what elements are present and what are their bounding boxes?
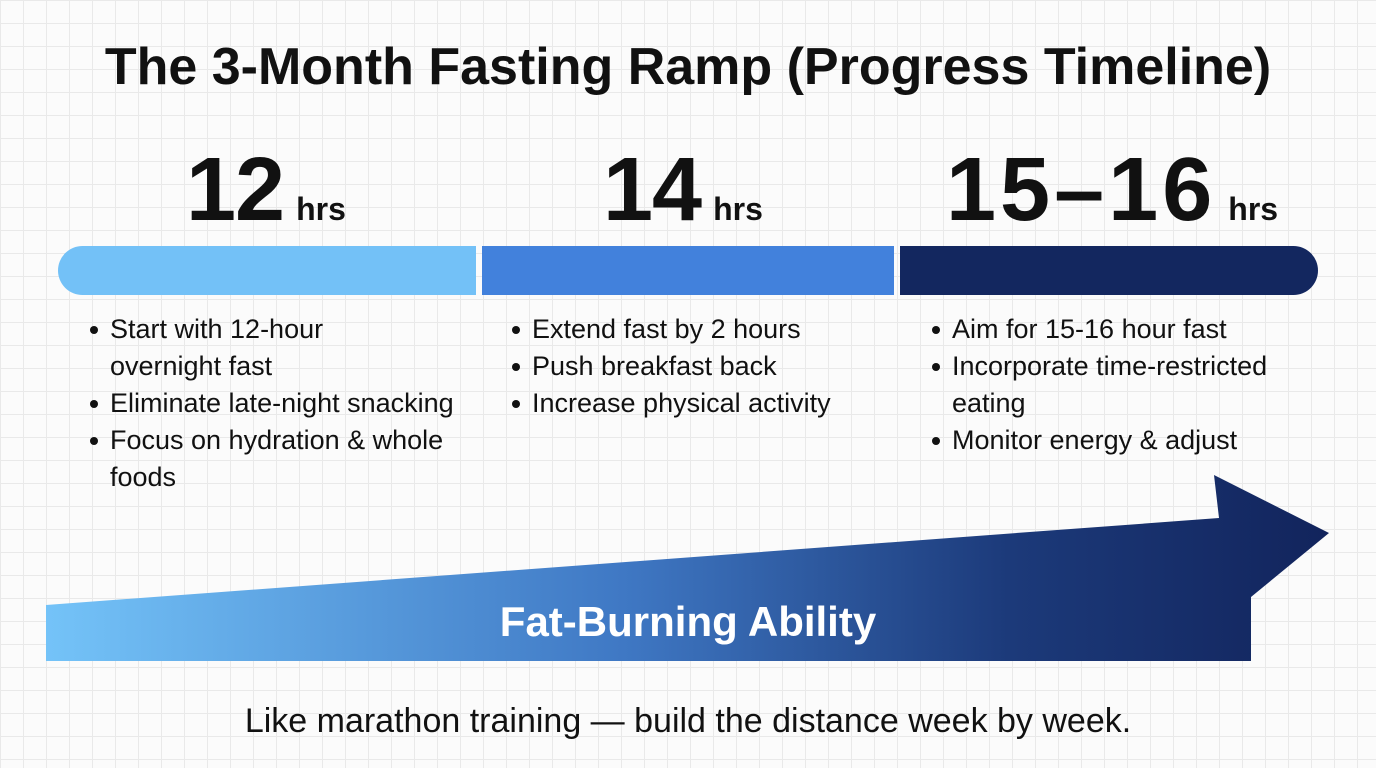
list: month 3: Aim for 15-16 hour fast [952, 314, 1227, 344]
list: month 1: overnight fast [110, 351, 272, 381]
segment 2 [482, 246, 894, 295]
list: month 2: Increase physical activity [532, 388, 831, 418]
segment 1 [58, 246, 476, 295]
footer caption: Like marathon training — build the distance week by week. [245, 702, 1131, 740]
list: month 3: Monitor energy & adjust [952, 425, 1237, 455]
heading: 15–16 hrs: 15–16 hrs [946, 140, 1278, 240]
title: The 3-Month Fasting Ramp (Progress Timeline) [105, 38, 1271, 96]
segment 3 [900, 246, 1318, 295]
list: month 2: Push breakfast back [532, 351, 777, 381]
ramp arrow: Fat-Burning Ability [500, 598, 877, 645]
heading: 12 hrs: 12 hrs [186, 140, 346, 240]
list: month 2: Extend fast by 2 hours [532, 314, 801, 344]
list: month 1: Focus on hydration & whole [110, 425, 443, 455]
heading: 14 hrs: 14 hrs [603, 140, 763, 240]
list: month 1: foods [110, 462, 176, 492]
list: month 1: Start with 12-hour [110, 314, 323, 344]
list: month 3: eating [952, 388, 1026, 418]
list: month 2 [512, 314, 831, 418]
list: month 1: Eliminate late-night snacking [110, 388, 454, 418]
list: month 1 [90, 314, 454, 492]
timeline bar [58, 246, 1318, 295]
list: month 3 [932, 314, 1267, 455]
list: month 3: Incorporate time-restricted [952, 351, 1267, 381]
